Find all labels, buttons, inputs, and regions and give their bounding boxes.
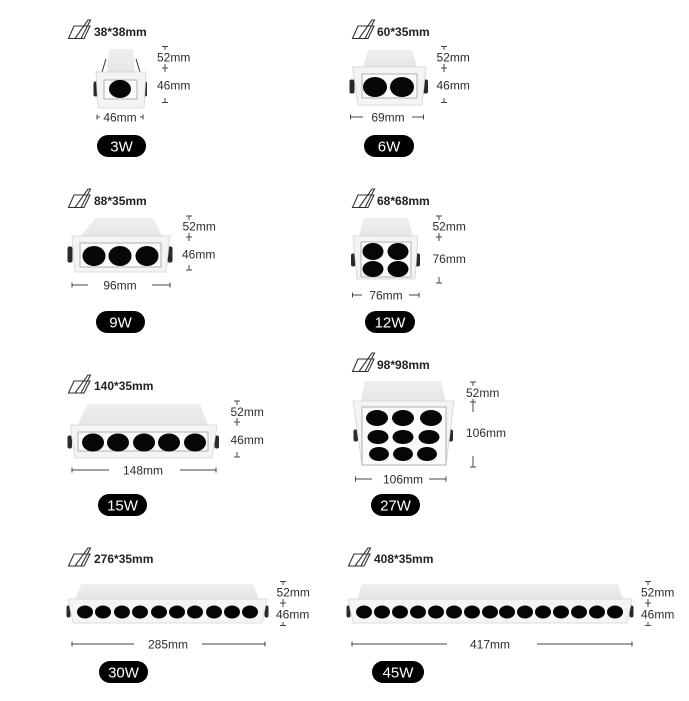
lamp: 15W (68, 404, 218, 458)
height dimension: 46mm (276, 608, 309, 622)
product: 9W (68, 189, 216, 333)
height dimension: 46mm (436, 78, 470, 92)
lamp: 45W (347, 584, 633, 623)
product: 27W (352, 353, 506, 516)
cut-out size label: 88*35mm (94, 194, 147, 208)
wattage badge (371, 494, 420, 516)
product: 12W (352, 189, 466, 333)
icon: cut-out size (352, 353, 374, 372)
product: 45W (347, 548, 674, 683)
height dimension (641, 582, 674, 626)
height dimension: 46mm (230, 433, 264, 447)
icon: cut-out size (68, 189, 90, 208)
width dimension (352, 288, 419, 302)
lamp: 3W (94, 49, 146, 108)
height dimension (466, 382, 506, 467)
product: 6W (350, 20, 470, 157)
cut-out size label: 98*98mm (377, 358, 430, 372)
product: 30W (67, 548, 310, 683)
height dimension: 46mm (641, 608, 674, 622)
width dimension: 417mm (470, 638, 510, 652)
height dimension: 106mm (466, 426, 506, 440)
lamp: 27W (353, 381, 454, 465)
wattage badge (99, 661, 148, 683)
wattage badge: 30W (108, 664, 140, 682)
height dimension (230, 401, 264, 457)
width dimension: 148mm (123, 464, 163, 478)
height dimension (436, 46, 470, 102)
icon: cut-out size (348, 548, 370, 566)
cut-out size label: 60*35mm (377, 25, 430, 39)
height dimension (182, 216, 216, 270)
icon: cut-out size (68, 548, 90, 566)
height dimension: 46mm (157, 78, 190, 92)
wattage badge: 12W (375, 314, 406, 332)
height dimension (157, 46, 190, 102)
width dimension: 76mm (369, 288, 403, 302)
wattage badge (96, 311, 145, 333)
icon: cut-out size (352, 189, 374, 208)
height dimension: 52mm (432, 220, 466, 234)
width dimension: 46mm (103, 110, 137, 124)
wattage badge (365, 311, 415, 333)
width dimension (72, 638, 265, 652)
cut-out size label: 68*68mm (377, 194, 430, 208)
lamp: 6W (350, 50, 428, 105)
cut-out size label: 140*35mm (94, 379, 153, 393)
lamp: 12W (352, 218, 420, 279)
cut-out size label: 408*35mm (374, 552, 433, 566)
wattage badge: 3W (110, 138, 134, 156)
height dimension: 76mm (432, 252, 466, 266)
icon: cut-out size (68, 20, 90, 38)
height dimension: 46mm (182, 248, 215, 262)
wattage badge: 15W (107, 498, 139, 514)
width dimension: 106mm (383, 472, 423, 486)
width dimension (356, 472, 446, 486)
cut-out size label: 38*38mm (94, 25, 147, 39)
icon: cut-out size (352, 20, 374, 38)
width dimension: 96mm (103, 278, 137, 292)
width dimension: 69mm (371, 110, 405, 124)
height dimension (432, 216, 466, 283)
height dimension: 52mm (230, 405, 264, 419)
wattage badge: 9W (109, 314, 133, 332)
height dimension: 52mm (157, 50, 190, 64)
height dimension: 52mm (641, 586, 674, 600)
width dimension (72, 464, 216, 478)
lamp: 9W (68, 218, 172, 272)
width dimension: 285mm (148, 638, 188, 652)
product: 15W (68, 375, 264, 516)
height dimension: 52mm (276, 586, 310, 600)
product: 3W (68, 20, 190, 157)
width dimension (72, 278, 170, 292)
lamp: 30W (67, 584, 268, 623)
cut-out size label: 276*35mm (94, 552, 153, 566)
height dimension: 52mm (182, 220, 216, 234)
height dimension (276, 582, 310, 626)
height dimension: 52mm (466, 386, 499, 400)
wattage badge: 6W (378, 138, 401, 156)
icon: cut-out size (68, 375, 90, 393)
height dimension: 52mm (436, 50, 470, 64)
wattage badge (372, 661, 424, 683)
wattage badge: 27W (380, 498, 412, 514)
wattage badge (98, 494, 147, 516)
wattage badge: 45W (383, 664, 414, 682)
width dimension (352, 638, 632, 652)
